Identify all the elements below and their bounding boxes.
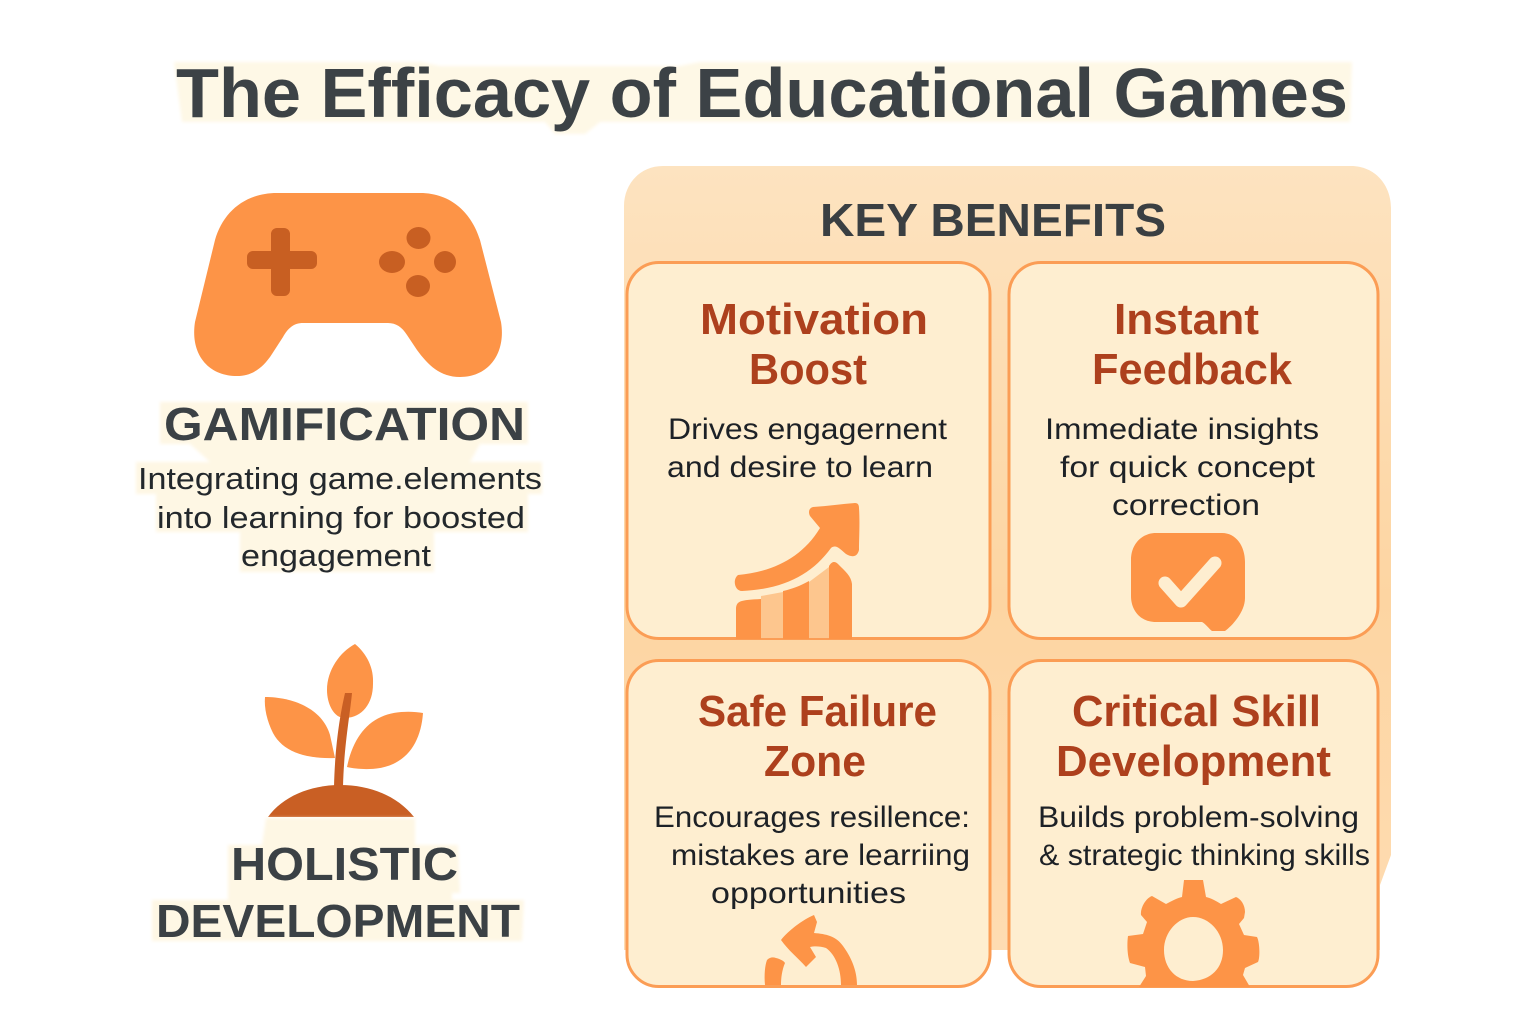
icon: gear bbox=[1127, 880, 1259, 987]
text block: gamification description: engagement bbox=[241, 538, 431, 573]
card: critical skill development: Development bbox=[1056, 737, 1331, 786]
heading: gamification: GAMIFICATION bbox=[164, 398, 525, 450]
card: motivation boost: Boost bbox=[749, 345, 867, 394]
text block: gamification description: Integrating game.elements bbox=[138, 461, 542, 496]
title: The Efficacy of Educational Games bbox=[176, 54, 1348, 132]
card: motivation boost: Drives engagernent bbox=[668, 413, 948, 446]
card: safe failure zone: opportunities bbox=[711, 877, 906, 910]
icon: speech bubble with check mark bbox=[1131, 533, 1245, 631]
card: safe failure zone: Encourages resillence: bbox=[654, 801, 970, 834]
card: instant feedback: Immediate insights bbox=[1045, 413, 1319, 446]
text block: gamification description bbox=[138, 461, 542, 573]
card: safe failure zone: Zone bbox=[764, 737, 866, 786]
icon: plant sprout bbox=[265, 644, 423, 817]
panel: key benefits bbox=[624, 166, 1391, 987]
card: instant feedback: Instant bbox=[1114, 295, 1259, 344]
heading: holistic development bbox=[152, 818, 524, 947]
card: critical skill development: & strategic thinking skills bbox=[1039, 839, 1370, 872]
heading: gamification bbox=[136, 398, 542, 572]
card: critical skill development: Critical Skill bbox=[1072, 687, 1321, 736]
card: critical skill development: Builds problem-solving bbox=[1038, 801, 1359, 834]
card: motivation boost: and desire to learn bbox=[667, 451, 933, 484]
heading: key benefits: KEY BENEFITS bbox=[820, 194, 1166, 246]
card: safe failure zone bbox=[627, 660, 990, 986]
icon: rising bar chart with arrow bbox=[735, 503, 859, 639]
text block: gamification description: into learning for boosted bbox=[157, 500, 525, 535]
icon: game controller bbox=[194, 193, 502, 377]
heading: holistic development: DEVELOPMENT bbox=[156, 895, 520, 947]
card: motivation boost: Motivation bbox=[700, 295, 928, 344]
card: critical skill development bbox=[1009, 660, 1378, 987]
card: motivation boost bbox=[627, 262, 990, 639]
card: safe failure zone: Safe Failure bbox=[698, 687, 937, 736]
card: instant feedback bbox=[1009, 262, 1378, 638]
icon: undo arrow bbox=[765, 915, 857, 985]
card: safe failure zone: mistakes are learriing bbox=[671, 839, 970, 872]
card: instant feedback: Feedback bbox=[1092, 345, 1293, 394]
card: instant feedback: for quick concept bbox=[1060, 451, 1316, 484]
heading: holistic development: HOLISTIC bbox=[231, 838, 458, 890]
card: instant feedback: correction bbox=[1112, 489, 1260, 522]
